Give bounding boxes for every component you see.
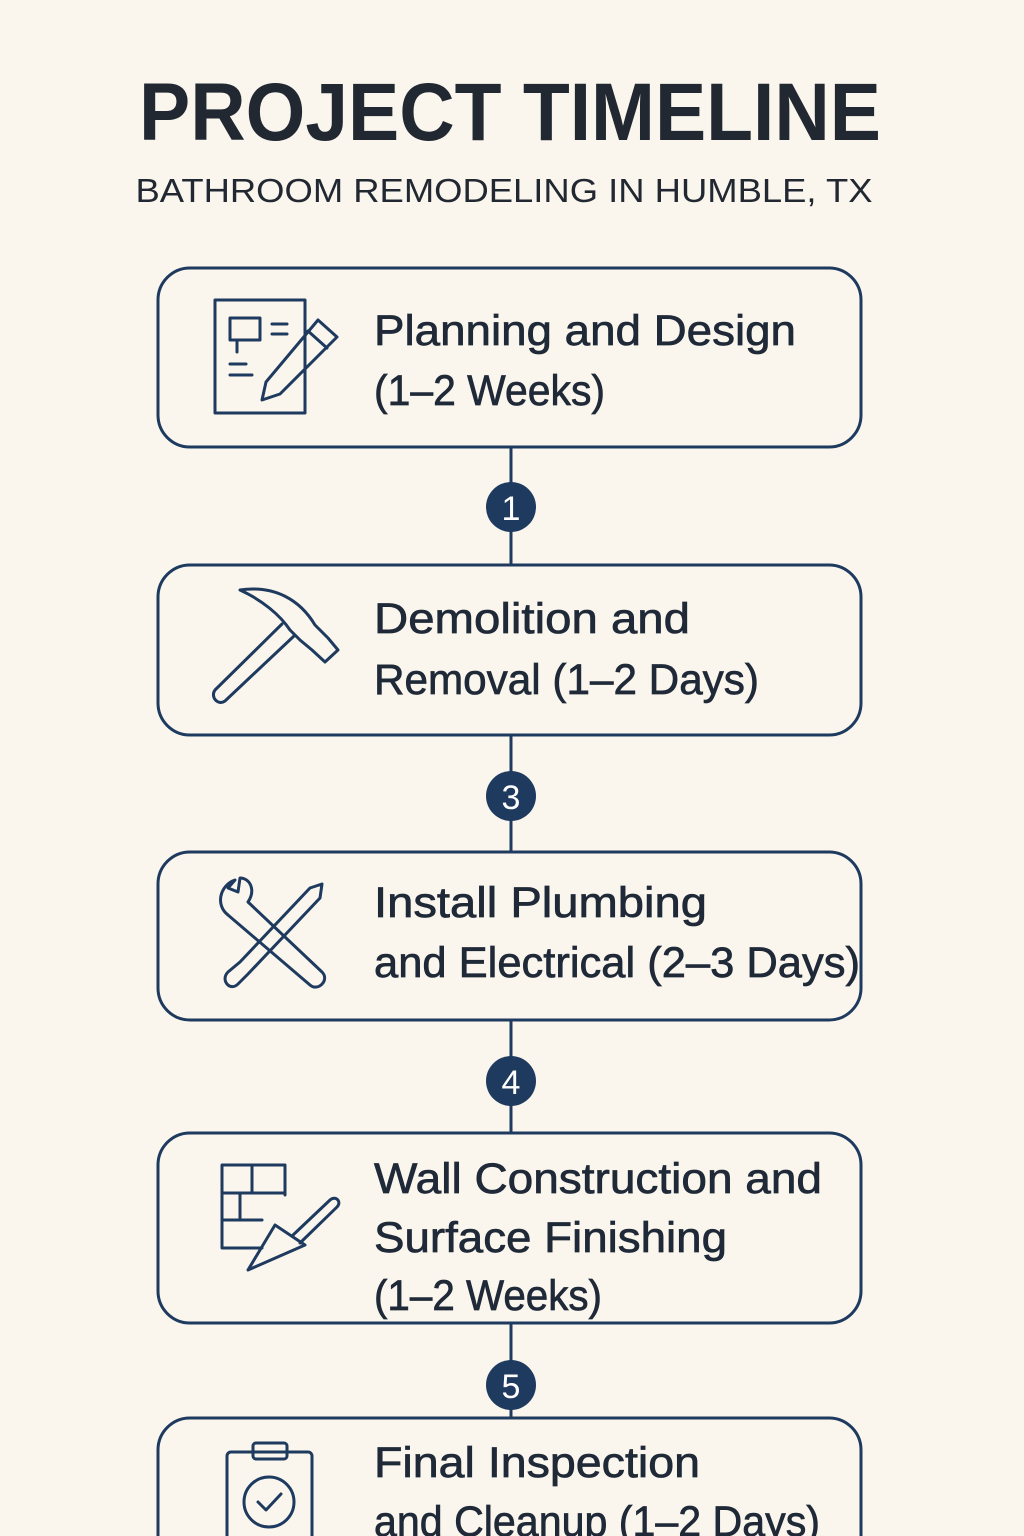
step 2 panel: [158, 565, 861, 735]
step marker 1: [486, 482, 536, 532]
title: PROJECT TIMELINE: [139, 67, 881, 158]
step 3 panel: [158, 852, 861, 1020]
step 1 panel: [158, 268, 861, 447]
icon: hammer: [213, 589, 338, 702]
step 3 panel: Install Plumbing: [374, 879, 707, 927]
step marker 1: 1: [502, 490, 520, 528]
icon: design document: [215, 300, 337, 413]
subtitle: BATHROOM REMODELING IN HUMBLE, TX: [136, 172, 872, 209]
icon: bricks and trowel: [222, 1165, 339, 1270]
step 4 panel: Wall Construction and: [374, 1155, 822, 1203]
icon: clipboard check: [227, 1443, 312, 1536]
step 2 panel: Demolition and: [374, 595, 690, 643]
step 5 panel: [158, 1418, 861, 1536]
step marker 5: 5: [502, 1368, 520, 1406]
icon: wrench and screwdriver: [221, 878, 325, 987]
connector line: [510, 447, 512, 1418]
step 2 panel: Removal (1–2 Days): [374, 656, 759, 704]
step 4 panel: Surface Finishing: [374, 1214, 727, 1262]
step marker 5: [486, 1360, 536, 1410]
step marker 3: 3: [502, 779, 520, 817]
step 4 panel: (1–2 Weeks): [374, 1272, 602, 1320]
step 3 panel: and Electrical (2–3 Days): [374, 939, 860, 987]
step marker 4: [486, 1056, 536, 1106]
step marker 4: 4: [502, 1064, 520, 1102]
step 1 panel: Planning and Design: [374, 307, 796, 355]
step 1 panel: (1–2 Weeks): [374, 367, 605, 415]
step marker 3: [486, 771, 536, 821]
step 4 panel: [158, 1133, 861, 1323]
step 5 panel: Final Inspection: [374, 1439, 700, 1487]
